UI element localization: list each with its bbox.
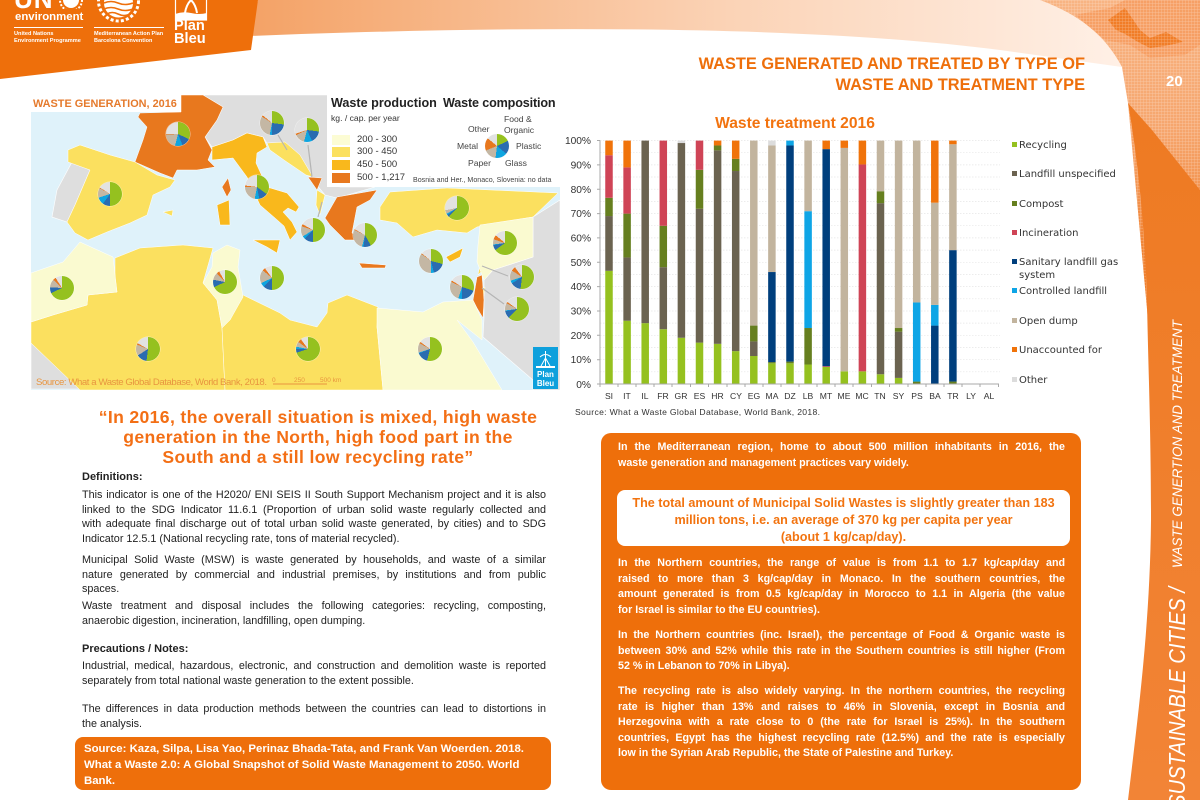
quote heading: South and a still low recycling rate”	[162, 447, 474, 467]
x axis labels: BA	[929, 391, 941, 401]
x axis labels: FR	[657, 391, 669, 401]
paragraph: waste per capita: for Israel is similar to the EU countries).	[618, 604, 820, 616]
x axis labels: LB	[803, 391, 814, 401]
paragraph: waste per capita: In the Northern countries, the range of value is from 1.1 to 1.7 kg/cap/day and	[618, 557, 1065, 569]
sea	[31, 112, 560, 390]
legend landfill unspecified: Landfill unspecified	[1019, 169, 1116, 180]
composition key labels	[457, 114, 541, 168]
legend sanitary landfill gas system: system	[1019, 270, 1055, 281]
chart legend	[1012, 140, 1118, 386]
swatch 200-300: 200 - 300	[357, 134, 397, 145]
definitions paragraph 2: spaces.	[82, 583, 119, 595]
chart source: Source: What a Waste Global Database, World Bank, 2018.	[575, 407, 820, 417]
x axis labels: TR	[947, 391, 959, 401]
bar PS	[913, 141, 920, 384]
bar MC	[859, 141, 866, 384]
precautions paragraph 2: The differences in data production methods between the countries can lead to distortions in	[82, 703, 546, 715]
definitions paragraph 1: linked to the SDG Indicator 11.6.1 (Proportion of urban solid waste regularly collected and	[82, 504, 546, 516]
vertical section label	[1164, 319, 1190, 800]
x axis labels: AL	[984, 391, 994, 401]
paragraph: food and organic share	[618, 629, 1065, 672]
logo: UN environment: Environment Programme	[14, 38, 81, 44]
page number: 20	[1166, 73, 1183, 90]
bar ES	[696, 141, 703, 384]
precautions heading: Precautions / Notes:	[82, 643, 188, 655]
logo: UN environment	[14, 0, 84, 44]
composition key labels: Metal	[457, 141, 478, 151]
peach top swoosh	[250, 0, 1122, 67]
grey countries	[31, 95, 560, 390]
legend unit: kg. / cap. per year	[331, 113, 400, 123]
paragraph: recycling rate: rate is higher than 13% and raises to 46% in Slovenia, except in Bosnia and	[618, 700, 1065, 712]
panel: key findings	[601, 433, 1081, 790]
x axis labels: MC	[855, 391, 869, 401]
composition key labels: Paper	[468, 158, 491, 168]
y axis labels: 80%	[571, 185, 591, 196]
bar EG	[750, 141, 758, 384]
paragraph: recycling rate: The recycling rate is also widely varying. In the northern countries, the recycling	[618, 685, 1065, 697]
bar IT	[623, 141, 631, 384]
callout: total municipal solid waste: million tons, i.e. an average of 370 kg per capita per year	[674, 513, 1013, 527]
y axis labels: 60%	[571, 234, 591, 244]
x axis labels: IT	[623, 391, 632, 401]
bar SY	[895, 141, 902, 384]
definitions paragraph 1: with adequate final discharge out of total urban solid waste generated, by cities) and to SDG	[82, 518, 546, 530]
quote heading: generation in the North, high food part in the	[123, 427, 513, 447]
x axis labels: MA	[766, 391, 779, 401]
main title: WASTE GENERATED AND TREATED BY TYPE OF	[699, 55, 1085, 73]
x axis labels: SI	[605, 391, 613, 401]
countries 200-300 pale	[31, 217, 533, 390]
swatch 300-450: 300 - 450	[357, 146, 397, 157]
legend open dump: Open dump	[1019, 316, 1078, 327]
chart: waste treatment 2016	[565, 115, 1000, 417]
map heading	[31, 95, 181, 112]
paragraph: food and organic share: between 30% and 52% while this rate in the Southern countries is still higher (From	[618, 644, 1065, 656]
definitions paragraph 2: Municipal Solid Waste (MSW) is waste generated by households, and waste of a similar	[82, 554, 546, 566]
intro text: In the Mediterranean region, home to about 500 million inhabitants in 2016, the	[618, 441, 1065, 453]
map legend	[327, 95, 560, 187]
y axis labels: 100%	[565, 136, 591, 147]
legend incineration: Incineration	[1019, 228, 1078, 239]
legend sanitary landfill gas system: Sanitary landfill gas	[1019, 257, 1118, 268]
paragraph: food and organic share: In the Northern countries (inc. Israel), the percentage of Food & Organic waste is	[618, 629, 1065, 641]
x axis labels: HR	[711, 391, 724, 401]
definitions paragraph 3: anaerobic digestion, incineration, landfilling, open dumping.	[82, 614, 365, 626]
y axis labels: 10%	[571, 355, 591, 366]
countries 450-500 amber	[212, 133, 463, 262]
main title	[698, 55, 1085, 94]
orange vertical band	[1128, 103, 1200, 800]
no-data note: Bosnia and Her., Monaco, Slovenia: no data	[413, 176, 551, 184]
stacked bars	[605, 141, 957, 384]
precautions paragraph 1	[82, 660, 546, 686]
legend recycling: Recycling	[1019, 140, 1067, 151]
composition key pie	[485, 134, 509, 158]
precautions paragraph 2: the analysis.	[82, 718, 142, 730]
swatch 450-500: 450 - 500	[357, 159, 397, 170]
paragraph: waste per capita	[618, 557, 1065, 616]
logo: UN environment: United Nations	[14, 31, 53, 37]
map scale bar: 250	[294, 377, 305, 384]
bar GR	[678, 141, 685, 384]
bar SI	[605, 141, 613, 384]
paragraph: food and organic share: 52 % in Lebanon to 70% in Libya).	[618, 660, 790, 672]
vertical section label: WASTE GENERTION AND TREATMENT	[1169, 319, 1185, 568]
y axis labels: 30%	[571, 306, 591, 318]
x axis labels: TN	[874, 391, 886, 401]
bar ME	[841, 141, 848, 384]
quote heading	[99, 407, 537, 467]
definitions paragraph 1: This indicator is one of the H2020/ ENI SEIS II South Support Mechanism project and it is also	[82, 489, 546, 501]
callout: total municipal solid waste: (about 1 kg/cap/day).	[781, 530, 906, 544]
x axis labels: LY	[966, 391, 976, 401]
callout: total municipal solid waste	[617, 490, 1070, 546]
legend unaccounted for: Unaccounted for	[1019, 345, 1103, 356]
paragraph: waste per capita: amount generated is from 0.5 kg/cap/day in Morocco to 1.1 in Algeria (the value	[618, 588, 1065, 600]
x axis labels: GR	[675, 391, 687, 401]
swatch 450-500	[332, 159, 397, 170]
composition key labels: Plastic	[516, 141, 541, 151]
logo: Plan Bleu: Bleu	[174, 31, 206, 47]
chart title: Waste treatment 2016	[715, 115, 875, 132]
definitions heading: Definitions:	[82, 471, 142, 483]
source box	[75, 737, 551, 790]
y axis labels: 90%	[571, 160, 591, 172]
y axis labels: 20%	[571, 331, 591, 342]
icon: Plan Bleu map badge	[533, 347, 558, 389]
paragraph: waste per capita: raised to more than 3 kg/cap/day in Monaco. In the southern countries, the	[618, 572, 1065, 584]
logo: UN environment: environment	[15, 11, 83, 23]
paragraph: recycling rate	[618, 685, 1065, 759]
orange header shape	[0, 0, 258, 79]
precautions paragraph 1: separately from total national waste generation to the extent possible.	[82, 674, 414, 686]
source box: Bank.	[84, 775, 115, 787]
x axis labels: ME	[838, 391, 851, 401]
y axis labels: 50%	[571, 258, 591, 269]
logo: Mediterranean Action Plan: Mediterranean Action Plan	[94, 31, 163, 37]
countries 500-1217 orange	[135, 95, 484, 318]
logo: Mediterranean Action Plan: Barcelona Convention	[94, 38, 152, 44]
bar BA	[931, 141, 939, 384]
composition key labels: Organic	[504, 125, 534, 135]
x axis labels: DZ	[784, 391, 796, 401]
bar CY	[732, 141, 739, 384]
definitions paragraph 2	[82, 554, 546, 595]
map panel: waste generation	[31, 95, 560, 390]
definitions paragraph 1	[82, 489, 546, 544]
swatch 500-1217	[332, 172, 405, 183]
main title: WASTE AND TREATMENT TYPE	[836, 76, 1085, 94]
quote heading: “In 2016, the overall situation is mixed, high waste	[99, 407, 537, 427]
pie charts: waste composition per country	[50, 110, 534, 362]
axes	[597, 140, 999, 387]
swatch 300-450	[332, 146, 397, 157]
definitions paragraph 1: Indicator 12.5.1 (National recycling rate, tons of material recycled).	[82, 532, 399, 544]
legend controlled landfill: Controlled landfill	[1019, 286, 1107, 297]
legend heading: waste production: Waste production	[331, 96, 437, 110]
logo: Plan Bleu: Plan	[174, 18, 205, 34]
x axis labels: PS	[911, 391, 923, 401]
bar HR	[714, 141, 721, 384]
legend other: Other	[1019, 375, 1048, 386]
map scale bar: 500 km	[320, 377, 341, 384]
bar FR	[660, 141, 667, 384]
source box: Source: Kaza, Silpa, Lisa Yao, Perinaz Bhada-Tata, and Frank Van Woerden. 2018.	[84, 743, 524, 755]
definitions paragraph 3: Waste treatment and disposal includes the following categories: recycling, composting,	[82, 600, 546, 612]
paragraph: recycling rate: Herzegovina with a rate close to 0 (the rate for Israel is 25%). In the southern	[618, 716, 1065, 728]
precautions paragraph 1: Industrial, medical, hazardous, electronic, and construction and demolition waste is reported	[82, 660, 546, 672]
right side patterned panel	[1040, 0, 1200, 320]
swatch 500-1217: 500 - 1,217	[357, 172, 405, 183]
y axis labels: 70%	[571, 209, 591, 220]
composition key labels: Glass	[505, 158, 527, 168]
composition key labels: Other	[468, 124, 490, 134]
x axis labels	[605, 391, 994, 401]
countries 300-450 yellow	[31, 142, 558, 390]
icon: Plan Bleu map badge: Bleu	[537, 379, 554, 388]
y axis labels: 40%	[571, 282, 591, 293]
x axis labels: IL	[641, 391, 649, 401]
swatch 200-300	[332, 134, 397, 145]
y axis labels: 0%	[576, 380, 591, 391]
legend sanitary landfill gas system	[1012, 257, 1118, 281]
callout: total municipal solid waste: The total amount of Municipal Solid Wastes is slightly greater than 183	[632, 496, 1055, 510]
definitions paragraph 2: nature generated by commercial and industrial premises, by institutions and from public	[82, 568, 546, 580]
bar TN	[877, 141, 884, 384]
bar LB	[804, 141, 812, 384]
paragraph: recycling rate: low in the Syrian Arab Republic, the State of Palestine and Turkey.	[618, 747, 953, 759]
legend heading: waste composition: Waste composition	[443, 96, 555, 110]
logo: Plan Bleu	[174, 0, 208, 47]
source box: What a Waste 2.0: A Global Snapshot of Solid Waste Management to 2050. World	[84, 759, 519, 771]
definitions paragraph 3	[82, 600, 546, 626]
map scale bar: 0	[272, 377, 276, 384]
x axis labels: SY	[893, 391, 904, 401]
x axis labels: ES	[694, 391, 705, 401]
composition key labels: Food &	[504, 114, 532, 124]
icon: Plan Bleu map badge: Plan	[537, 370, 554, 379]
bar DZ	[786, 141, 794, 384]
x axis labels: EG	[748, 391, 761, 401]
paragraph: recycling rate: countries, Egypt has the highest recycling rate (12.5%) and the rate is especially	[618, 732, 1065, 744]
leader lines	[278, 135, 508, 304]
legend compost: Compost	[1019, 199, 1064, 210]
intro text: waste generation and management practices vary widely.	[618, 456, 909, 468]
intro text	[618, 441, 1065, 468]
map scale bar	[272, 377, 341, 384]
bar MT	[822, 141, 830, 384]
bar MA	[768, 141, 776, 384]
bar TR	[949, 141, 957, 384]
y axis labels	[565, 136, 591, 391]
map source: Source: What a Waste Global Database, World Bank, 2018.	[36, 377, 267, 388]
map heading: WASTE GENERATION, 2016	[33, 98, 177, 110]
bar IL	[641, 141, 649, 384]
x axis labels: MT	[820, 391, 833, 401]
logo: Mediterranean Action Plan	[94, 0, 164, 44]
precautions paragraph 2	[82, 703, 546, 730]
x axis labels: CY	[730, 391, 742, 401]
